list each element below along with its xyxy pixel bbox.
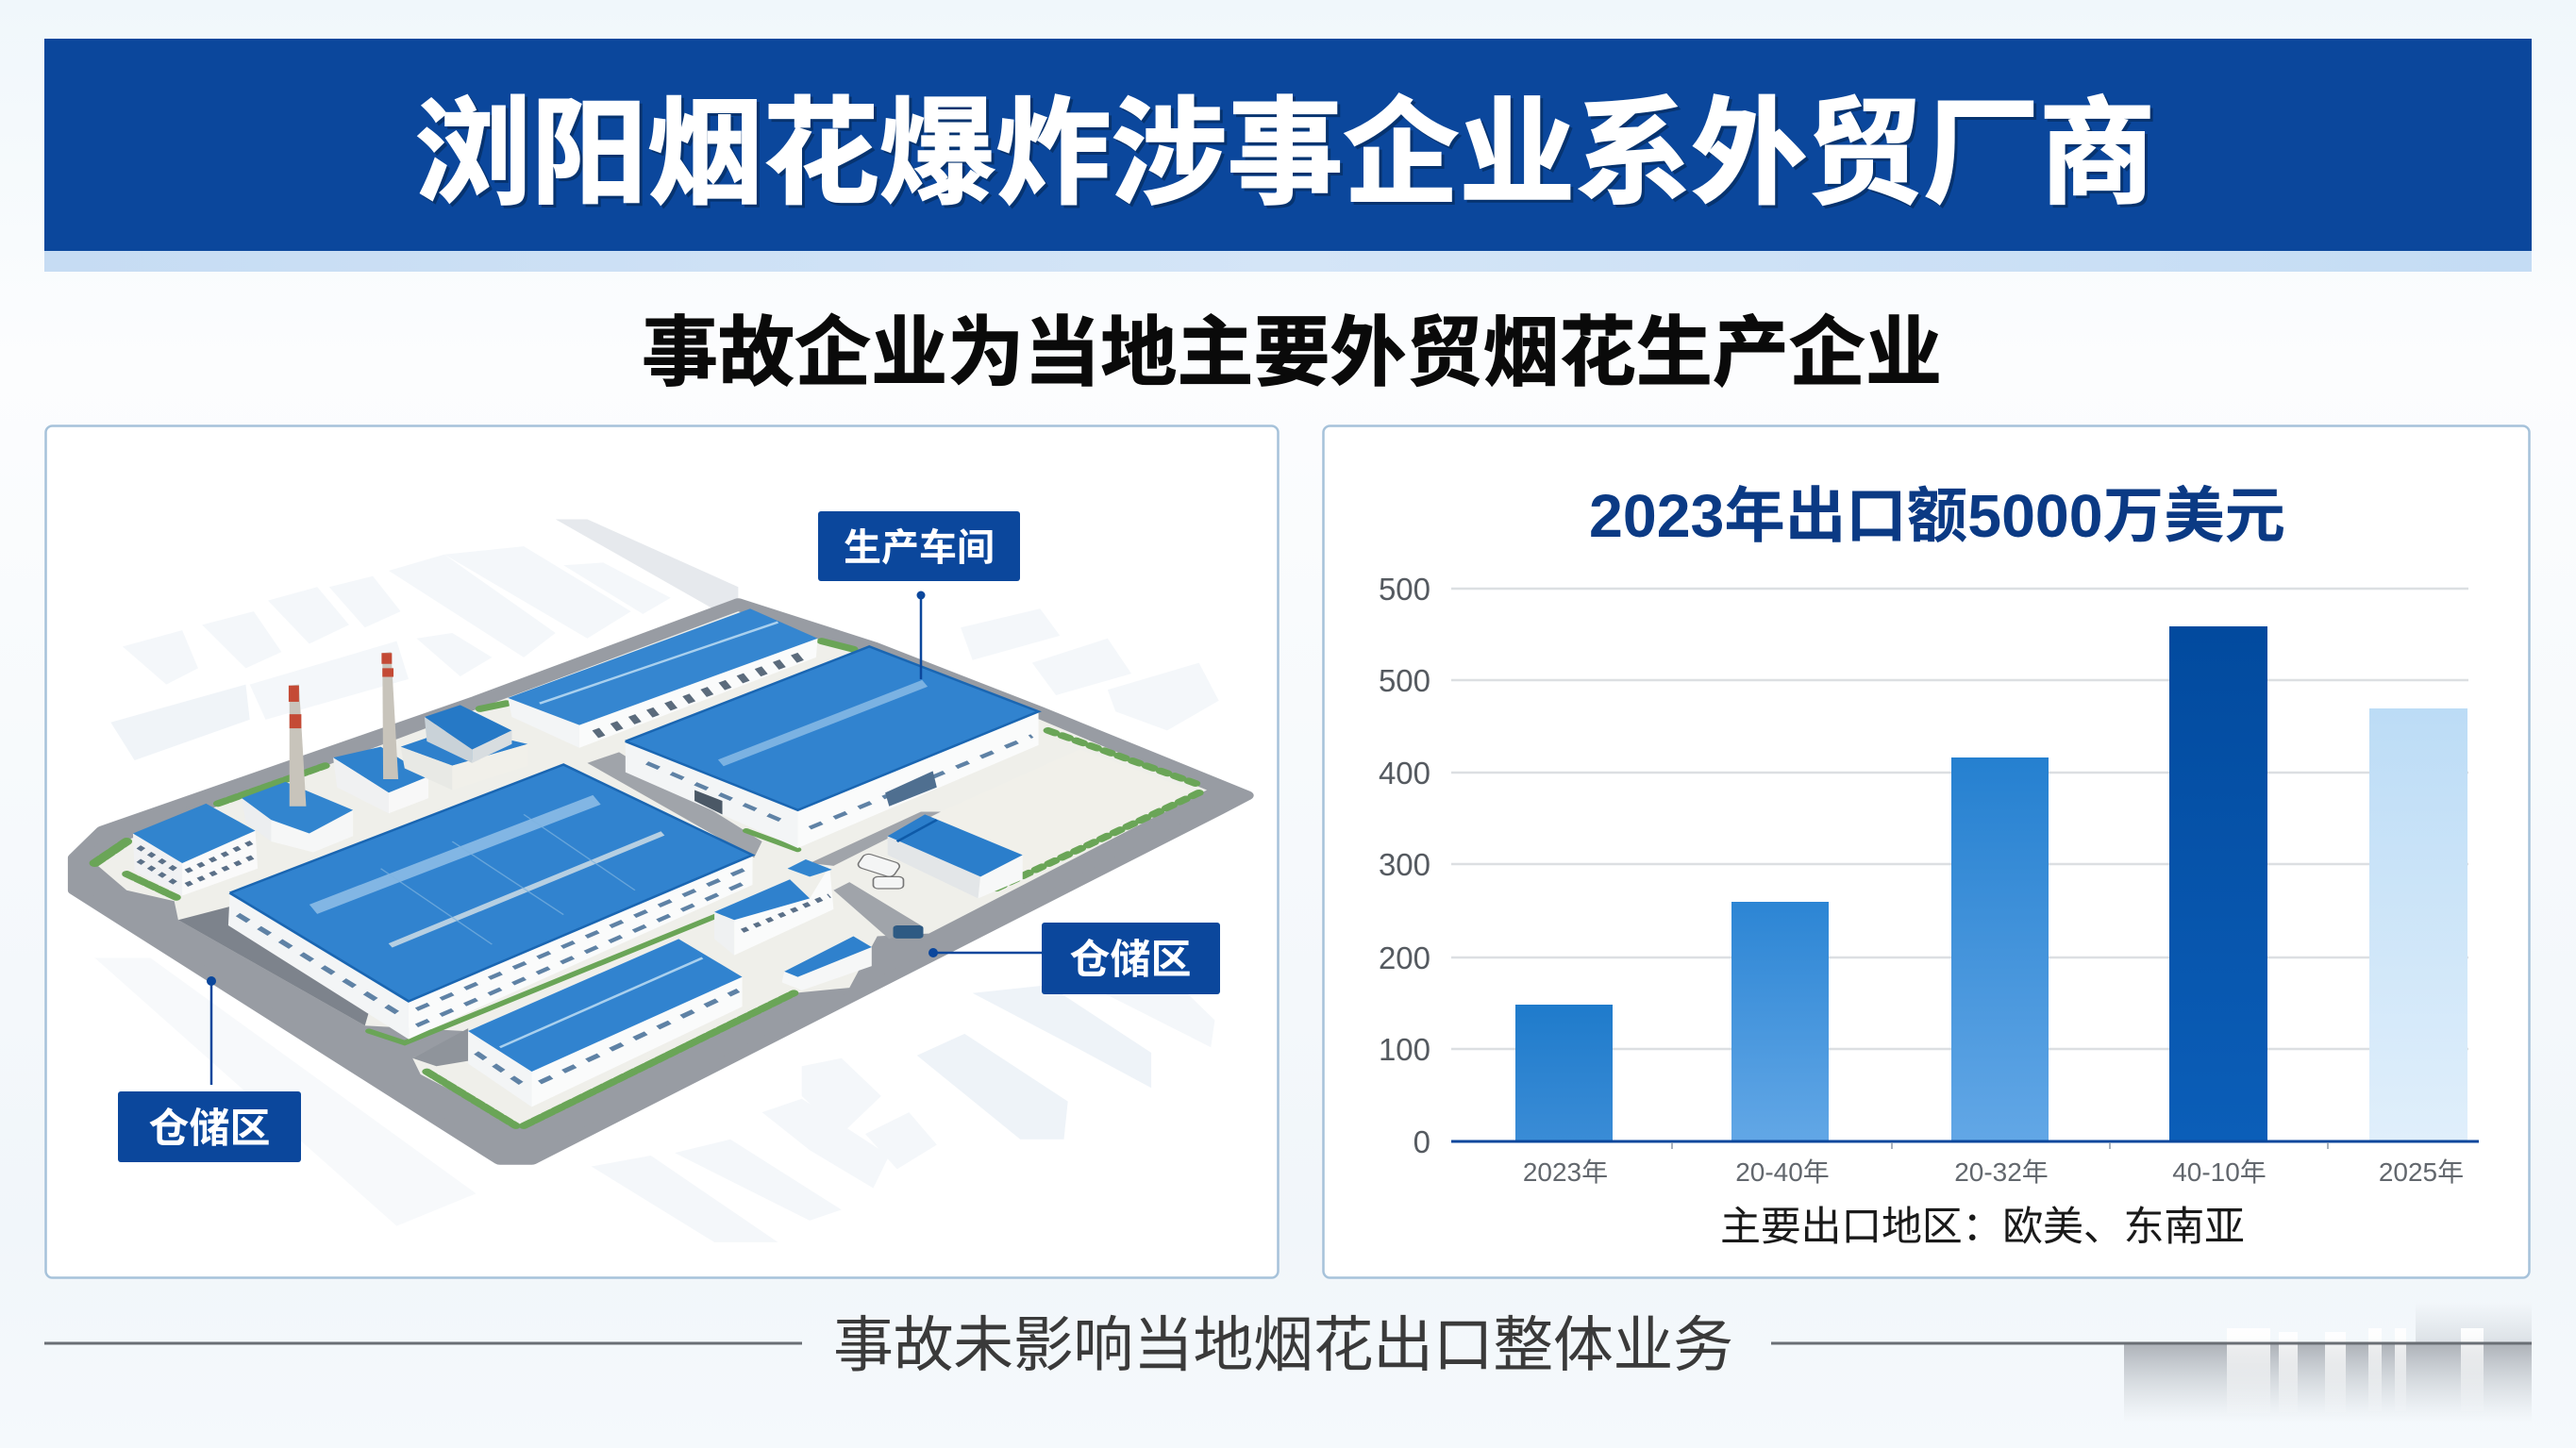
building: lower workshop: [468, 939, 743, 1107]
connector: workshop: [917, 591, 925, 679]
vehicles: [856, 853, 924, 939]
building: left office: [133, 804, 258, 895]
building: upper workshop: [508, 608, 818, 748]
building: right garage: [888, 814, 1023, 898]
title banner: [44, 39, 2532, 272]
x axis labels: [1523, 1157, 2464, 1187]
y axis labels: [1379, 572, 1430, 1159]
label: 仓储区 left: [118, 1091, 301, 1162]
x axis labels: 2023年: [1523, 1157, 1608, 1187]
label: 仓储区 right: 仓储区: [1070, 927, 1191, 986]
title: 浏阳烟花爆炸涉事企业系外贸厂商: [418, 62, 2158, 230]
panel: factory park illustration: [45, 426, 1278, 1277]
chart caption: 主要出口地区：欧美、东南亚: [1720, 1194, 2245, 1253]
site ground: [95, 611, 1207, 1128]
x axis labels: 40-10年: [2172, 1157, 2267, 1187]
connector: storage left: [207, 976, 216, 1085]
hedges: [95, 641, 1199, 1125]
factory aerial view: [75, 519, 1246, 1242]
footer divider left: [44, 1341, 802, 1345]
chart title: 2023年出口额5000万美元: [1589, 482, 2285, 550]
y axis labels: 300: [1379, 847, 1430, 882]
footer divider right: [1771, 1341, 2532, 1345]
footer statement: 事故未影响当地烟花出口整体业务: [833, 1297, 1733, 1384]
y axis labels: 500: [1379, 663, 1430, 698]
x axis labels: 2025年: [2379, 1157, 2464, 1187]
building: small shed: [782, 937, 872, 990]
chimney 1: [289, 685, 306, 807]
panel: export bar chart: [1323, 426, 2529, 1277]
y axis labels: 0: [1413, 1124, 1430, 1159]
building: centre office: [714, 859, 833, 956]
chimney 2: [381, 652, 398, 779]
y axis labels: 500: [1379, 572, 1430, 607]
bars: [1515, 626, 2467, 1141]
y axis labels: 400: [1379, 756, 1430, 791]
bar chart: [1379, 572, 2479, 1187]
label: 生产车间: [818, 511, 1020, 581]
label: 仓储区 left: 仓储区: [149, 1096, 270, 1155]
title: 浏阳烟花爆炸涉事企业系外贸厂商: [415, 59, 2155, 227]
x axis labels: 20-40年: [1735, 1157, 1830, 1187]
building: big workshop: [228, 765, 753, 1040]
parking: [921, 749, 1199, 895]
x axis labels: 20-32年: [1954, 1157, 2049, 1187]
subtitle: 事故企业为当地主要外贸烟花生产企业: [642, 291, 1942, 402]
y axis labels: 100: [1379, 1032, 1430, 1067]
building: main workshop: [626, 646, 1039, 848]
road base: [556, 519, 738, 614]
x axis: [1451, 1141, 2479, 1149]
y axis labels: 200: [1379, 940, 1430, 975]
label: 仓储区 right: [1042, 923, 1220, 994]
watermark smudge: [2124, 1302, 2532, 1423]
label: 生产车间: 生产车间: [844, 517, 995, 572]
connector: storage right: [928, 948, 1042, 957]
building: chimney plant: [242, 652, 527, 853]
